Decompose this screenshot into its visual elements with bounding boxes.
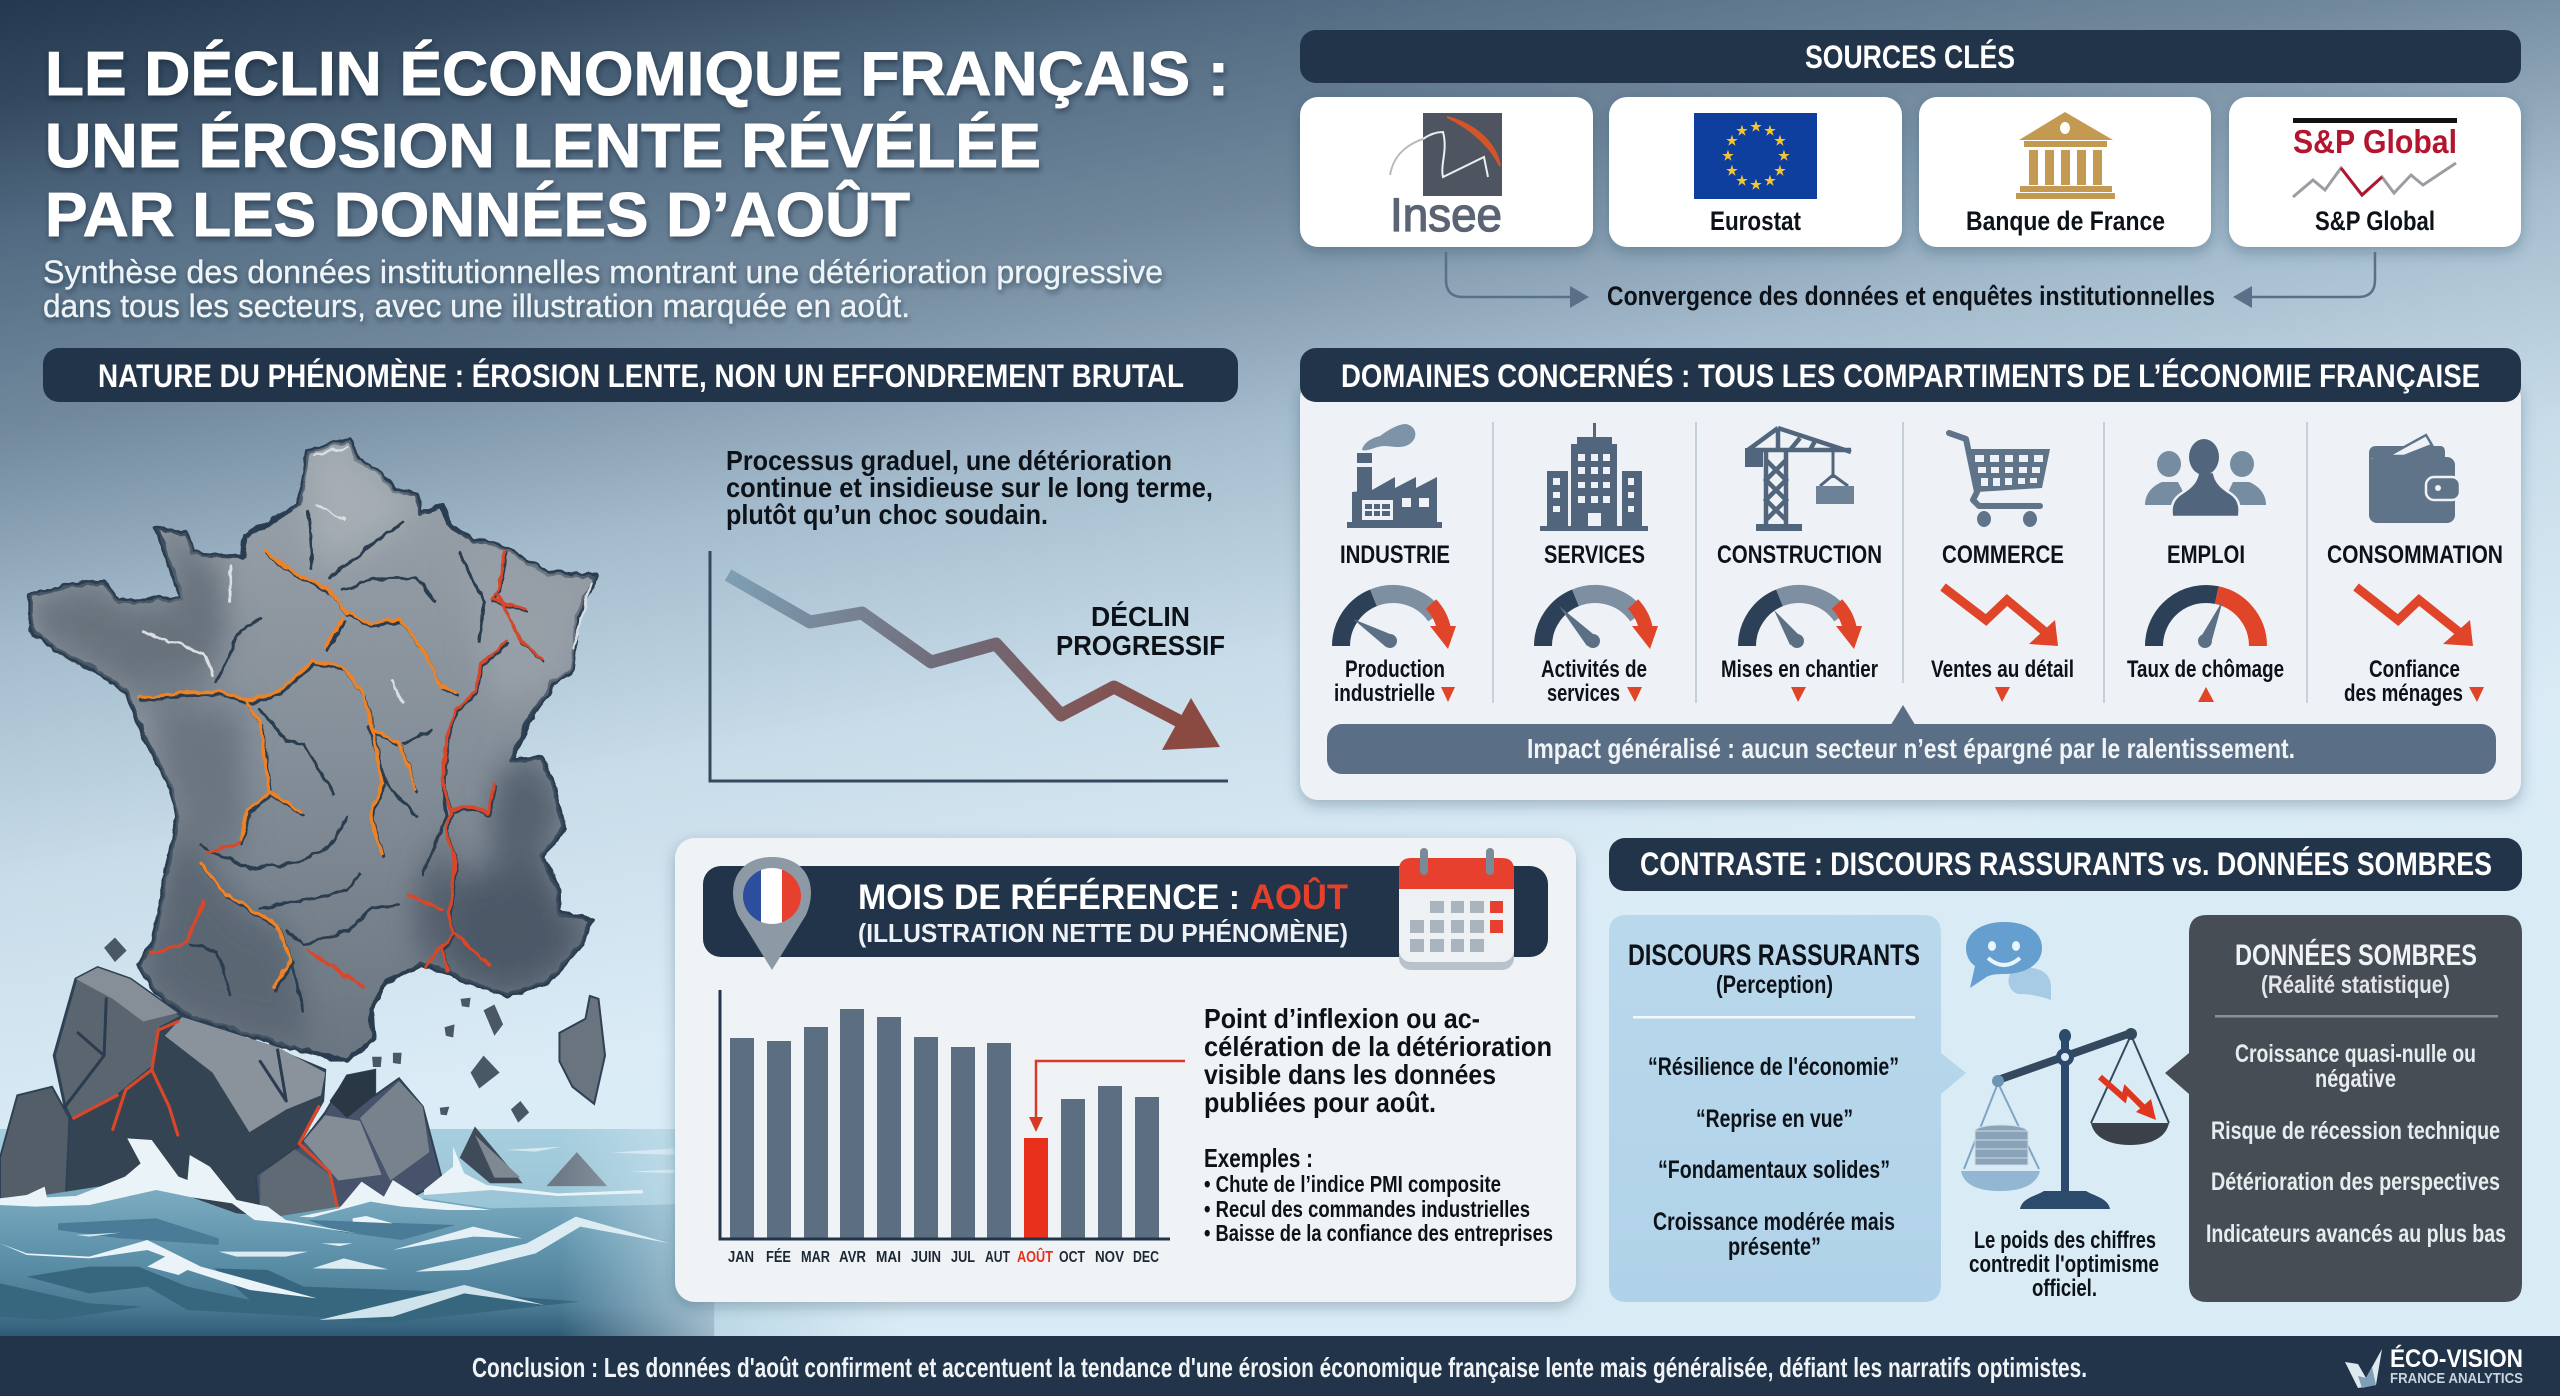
caption: poids des chiffres: contredit l'optimisme (1969, 1251, 2159, 1278)
trend: consommation (2356, 587, 2473, 646)
trend: commerce (1943, 587, 2058, 646)
chart: déclin progressif: PROGRESSIF (1056, 630, 1225, 661)
bar chart: monthly data: NOV (1095, 1249, 1124, 1266)
callout: impact généralisé (1327, 705, 2496, 774)
card: Insee: Insee (1390, 188, 1502, 241)
panel: discours rassurants: “Reprise en vue” (1696, 1105, 1853, 1133)
panel: discours rassurants (1609, 915, 1966, 1302)
text: processus graduel: plutôt qu’un choc soudain. (726, 499, 1048, 530)
chart: déclin progressif (710, 551, 1228, 781)
text: exemples: • Baisse de la confiance des entreprises (1204, 1220, 1553, 1246)
panel: discours rassurants: (Perception) (1716, 971, 1833, 999)
illustration: distant sea (0, 1129, 900, 1336)
text: exemples (1204, 1143, 1553, 1246)
banner: mois de référence août: MOIS DE RÉFÉRENCE : (858, 877, 1240, 917)
icon: speech bubbles (1966, 922, 2051, 1000)
panel: domaines concernés (1300, 348, 2521, 800)
card: Insee (1300, 97, 1593, 247)
icon: wallet (2369, 435, 2460, 523)
icon: factory (1347, 424, 1442, 528)
subtitle: dans tous les secteurs, avec une illustration marquée en août. (43, 288, 910, 324)
arrow: inflection leader (1029, 1061, 1185, 1132)
icon: shopping cart (1949, 433, 2050, 527)
text: exemples: • Recul des commandes industrielles (1204, 1196, 1530, 1222)
subtitle (43, 254, 1163, 324)
footer (0, 1336, 2560, 1396)
card: Eurostat: ★ (1764, 123, 1776, 138)
indicators: des ménages (2344, 680, 2463, 707)
panel: données sombres: DONNÉES SOMBRES (2235, 938, 2477, 972)
illustration: cracked France map on crumbling rocks (0, 440, 607, 1226)
icon: French flag pin (733, 857, 811, 970)
text: point d'inflexion: visible dans les données (1204, 1059, 1496, 1090)
sector labels: EMPLOI (2167, 541, 2245, 569)
gauge: emploi (2154, 594, 2258, 648)
bar chart: monthly data: MAI (876, 1249, 901, 1266)
card: Banque de France (1919, 97, 2211, 247)
subtitle: Synthèse des données institutionnelles montrant une détérioration progressive (43, 254, 1163, 290)
heading: contraste (1609, 838, 2522, 891)
sector labels: CONSOMMATION (2327, 541, 2503, 569)
text: processus graduel: Processus graduel, une détérioration (726, 445, 1172, 476)
banner: mois de référence août: (ILLUSTRATION NETTE DU PHÉNOMÈNE) (858, 918, 1348, 948)
text: exemples: • Chute de l’indice PMI composite (1204, 1171, 1501, 1197)
title (45, 40, 1229, 250)
bar chart: monthly data: JUIN (911, 1249, 941, 1266)
card: S&P Global (2229, 97, 2521, 247)
logo: éco-vision: FRANCE ANALYTICS (2390, 1370, 2523, 1387)
panel: données sombres: négative (2315, 1065, 2396, 1093)
heading: nature du phénomène (43, 348, 1238, 402)
logo: éco-vision (2345, 1344, 2523, 1388)
heading: sources clés (1300, 30, 2521, 83)
card: Eurostat: ★ (1778, 148, 1790, 163)
bar chart: monthly data: JAN (728, 1249, 754, 1266)
bar chart: monthly data: AOÛT (1017, 1247, 1053, 1266)
bar chart: monthly data: DEC (1133, 1249, 1159, 1266)
icon: building (1540, 423, 1648, 531)
callout: impact généralisé: Impact généralisé : aucun secteur n’est épargné par le ralentissement. (1527, 733, 2295, 764)
bar chart: monthly data: JUL (951, 1249, 975, 1266)
card: Eurostat: ★ (1774, 163, 1786, 178)
chart: déclin progressif: DÉCLIN (1091, 601, 1190, 632)
card: Eurostat: ★ (1764, 173, 1776, 188)
illustration: foreground waves and foam (0, 1138, 714, 1337)
panel: discours rassurants: DISCOURS RASSURANTS (1628, 939, 1920, 972)
sector labels: CONSTRUCTION (1717, 541, 1882, 569)
card: Eurostat: ★ (1722, 148, 1734, 163)
indicators: services (1547, 680, 1620, 707)
indicators: Taux de chômage (2127, 656, 2284, 683)
map of France (30, 440, 596, 1070)
text: point d'inflexion (1204, 1003, 1552, 1118)
falling debris and Corsica (104, 938, 605, 1123)
bar chart: monthly data: MAR (801, 1249, 830, 1266)
card: Eurostat: ★ (1736, 123, 1748, 138)
card: Eurostat: ★ (1726, 133, 1738, 148)
card: Eurostat: Eurostat (1710, 206, 1801, 236)
panel: mois de référence (675, 838, 1576, 1302)
indicators: industrielle (1334, 680, 1435, 707)
card: Eurostat: ★ (1774, 133, 1786, 148)
sector labels: INDUSTRIE (1340, 541, 1450, 569)
convergence arrows and text (1446, 252, 2375, 311)
gauge: construction (1747, 594, 1862, 649)
panel: données sombres: Croissance quasi-nulle ou (2235, 1040, 2476, 1068)
indicators: Activités de (1541, 656, 1647, 683)
icon: people (2145, 439, 2266, 517)
banner: mois de référence août: AOÛT (1250, 877, 1348, 917)
sector labels: COMMERCE (1942, 541, 2064, 569)
sea fade (560, 1129, 900, 1336)
icon: calendar (1399, 848, 1514, 970)
indicators (1334, 656, 2484, 707)
card: Eurostat: ★ (1750, 177, 1762, 192)
card: S&P Global: S&P Global (2315, 206, 2435, 236)
bar chart: monthly data (720, 990, 1170, 1266)
indicators: Mises en chantier (1721, 656, 1878, 683)
panel: discours rassurants: présente” (1728, 1233, 1821, 1261)
text: point d'inflexion: célération de la détérioration (1204, 1031, 1552, 1062)
title: PAR LES DONNÉES D’AOÛT (45, 181, 910, 250)
bar chart: monthly data: OCT (1059, 1249, 1085, 1266)
sector labels: SERVICES (1544, 541, 1645, 569)
icon: balance scale (1961, 1028, 2169, 1209)
icon: crane (1745, 428, 1854, 531)
caption: poids des chiffres: officiel. (2032, 1275, 2097, 1302)
card: Eurostat: ★ (1726, 163, 1738, 178)
banner: mois de référence août (703, 866, 1548, 957)
sector labels (1340, 541, 2503, 569)
panel: discours rassurants: Croissance modérée mais (1653, 1208, 1895, 1236)
bar chart: monthly data: AVR (839, 1249, 866, 1266)
text: exemples: Exemples : (1204, 1143, 1313, 1173)
card: Eurostat: ★ (1736, 173, 1748, 188)
indicators: Ventes au détail (1931, 656, 2074, 683)
logo: éco-vision: ÉCO-VISION (2390, 1344, 2523, 1373)
bar chart: monthly data: AUT (985, 1249, 1010, 1266)
card: Eurostat (1609, 97, 1902, 247)
card: S&P Global: S&P Global (2293, 123, 2457, 160)
title: UNE ÉROSION LENTE RÉVÉLÉE (45, 112, 1041, 181)
panel: discours rassurants: “Fondamentaux solides” (1658, 1156, 1890, 1184)
text: processus graduel: continue et insidieuse sur le long terme, (726, 472, 1213, 503)
title: LE DÉCLIN ÉCONOMIQUE FRANÇAIS : (45, 40, 1229, 109)
card: Banque de France: Banque de France (1966, 206, 2165, 236)
text: point d'inflexion: Point d’inflexion ou ac- (1204, 1003, 1480, 1034)
panel: données sombres (2165, 915, 2522, 1302)
caption: poids des chiffres: Le poids des chiffres (1974, 1227, 2156, 1254)
indicators: Production (1345, 656, 1445, 683)
text: processus graduel (726, 445, 1213, 530)
text: point d'inflexion: publiées pour août. (1204, 1087, 1436, 1118)
heading: sources clés: SOURCES CLÉS (1805, 39, 2015, 75)
gauge: industrie (1341, 594, 1456, 649)
indicators: Confiance (2369, 656, 2460, 683)
bar chart: monthly data: FÉE (766, 1247, 791, 1266)
card: Eurostat: ★ (1750, 119, 1762, 134)
convergence arrows and text: Convergence des données et enquêtes institutionnelles (1607, 281, 2215, 311)
rocks (0, 968, 607, 1226)
panel: discours rassurants: “Résilience de l'économie” (1648, 1053, 1899, 1081)
gauge: services (1543, 594, 1658, 649)
heading: nature du phénomène: NATURE DU PHÉNOMÈNE : ÉROSION LENTE, NON UN EFFONDREMENT BRUTAL (98, 358, 1184, 394)
caption: poids des chiffres (1969, 1227, 2159, 1302)
panel: données sombres: (Réalité statistique) (2261, 971, 2450, 999)
